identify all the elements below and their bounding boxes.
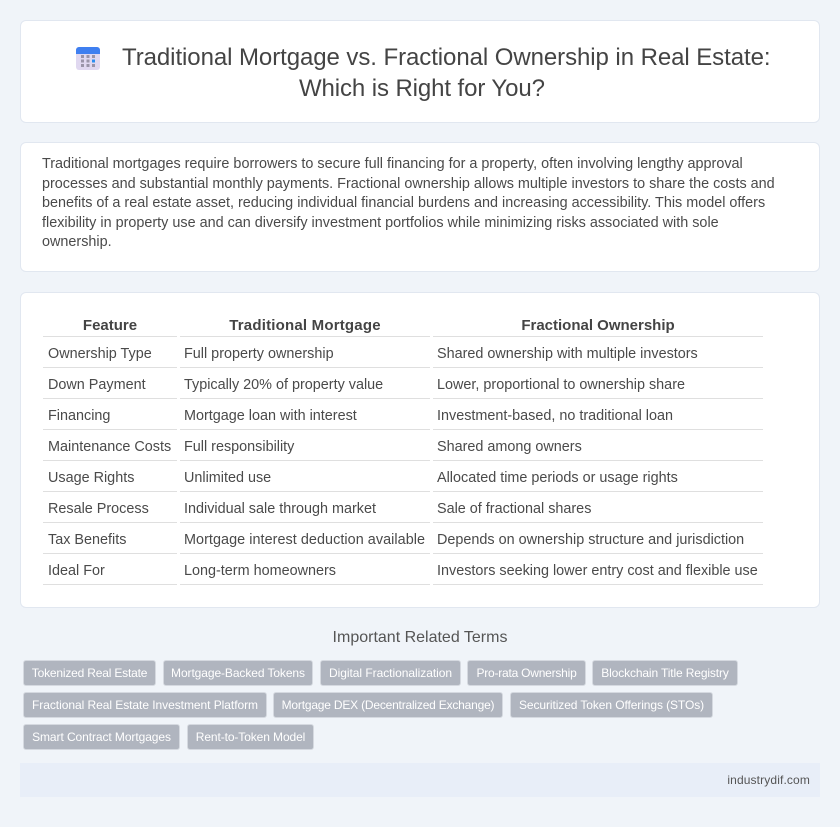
heading: related terms: Important Related Terms bbox=[333, 629, 507, 646]
title bbox=[122, 44, 770, 102]
table row: Ownership Type: Ownership Type bbox=[48, 346, 152, 362]
intro paragraph: flexibility in property use and can diversify investment portfolios while minimizing risks associated with sole bbox=[42, 214, 719, 230]
table row: Ownership Type: Shared ownership with multiple investors bbox=[437, 346, 698, 362]
table header: Traditional Mortgage bbox=[229, 317, 381, 334]
table row: Down Payment: Down Payment bbox=[48, 377, 146, 393]
table row: Resale Process: Resale Process bbox=[48, 501, 149, 517]
table row: Financing: Mortgage loan with interest bbox=[184, 408, 357, 424]
table row: Ideal For: Long-term homeowners bbox=[184, 563, 336, 579]
icon: calendar bbox=[76, 47, 100, 70]
table row: Maintenance Costs: Shared among owners bbox=[437, 439, 582, 455]
table row: Usage Rights: Unlimited use bbox=[184, 470, 271, 486]
tag bbox=[187, 724, 314, 750]
table row: Usage Rights: Usage Rights bbox=[48, 470, 134, 486]
table row: Tax Benefits bbox=[48, 532, 744, 548]
tag: Fractional Real Estate Investment Platform bbox=[32, 698, 258, 712]
panel: comparison table bbox=[20, 292, 820, 608]
intro paragraph: processes and substantial monthly payments. Fractional ownership allows multiple investors to share the costs and bbox=[42, 176, 775, 192]
tag bbox=[592, 660, 738, 686]
intro paragraph: benefits of a real estate asset, reducing individual financial burdens and increasing accessibility. This model offers bbox=[42, 195, 765, 211]
tag bbox=[510, 692, 713, 718]
table row: Resale Process: Sale of fractional shares bbox=[437, 501, 591, 517]
table row: Resale Process: Individual sale through market bbox=[184, 501, 376, 517]
tag bbox=[23, 692, 267, 718]
table row: Usage Rights: Allocated time periods or usage rights bbox=[437, 470, 678, 486]
tag: Pro-rata Ownership bbox=[476, 666, 577, 680]
tag: Rent-to-Token Model bbox=[196, 730, 305, 744]
table row: Down Payment: Lower, proportional to ownership share bbox=[437, 377, 685, 393]
table row: Tax Benefits: Tax Benefits bbox=[48, 532, 126, 548]
table row: Ideal For bbox=[48, 563, 758, 579]
tag: Securitized Token Offerings (STOs) bbox=[519, 698, 704, 712]
table row: Ideal For: Ideal For bbox=[48, 563, 105, 579]
table row: Down Payment bbox=[48, 377, 685, 393]
table row: Maintenance Costs: Maintenance Costs bbox=[48, 439, 171, 455]
tag bbox=[320, 660, 461, 686]
tag bbox=[23, 724, 180, 750]
table row: Maintenance Costs: Full responsibility bbox=[184, 439, 294, 455]
table header: Feature bbox=[83, 317, 137, 334]
title: Traditional Mortgage vs. Fractional Ownership in Real Estate: bbox=[122, 44, 770, 71]
tag: Mortgage DEX (Decentralized Exchange) bbox=[282, 698, 494, 712]
table row: Ownership Type bbox=[48, 346, 698, 362]
table row: Ideal For: Investors seeking lower entry cost and flexible use bbox=[437, 563, 758, 579]
tag group: related terms bbox=[23, 660, 738, 750]
table row: Tax Benefits: Mortgage interest deduction available bbox=[184, 532, 425, 548]
intro paragraph: ownership. bbox=[42, 234, 112, 250]
table row: Maintenance Costs bbox=[48, 439, 582, 455]
footer bar bbox=[20, 763, 820, 797]
table row: Financing: Financing bbox=[48, 408, 110, 424]
table row: Financing bbox=[48, 408, 673, 424]
panel: title card bbox=[20, 20, 820, 123]
intro paragraph: Traditional mortgages require borrowers to secure full financing for a property, often involving lengthy approval bbox=[42, 156, 743, 172]
table row: Down Payment: Typically 20% of property value bbox=[184, 377, 383, 393]
panel: intro text bbox=[20, 142, 820, 272]
table row: Resale Process bbox=[48, 501, 591, 517]
tag: Tokenized Real Estate bbox=[32, 666, 147, 680]
table header: Fractional Ownership bbox=[521, 317, 675, 334]
intro paragraph bbox=[42, 156, 775, 250]
title: Which is Right for You? bbox=[299, 75, 545, 102]
tag: Mortgage-Backed Tokens bbox=[171, 666, 305, 680]
tag: Digital Fractionalization bbox=[329, 666, 452, 680]
table header bbox=[83, 317, 675, 334]
table row: Financing: Investment-based, no traditional loan bbox=[437, 408, 673, 424]
tag bbox=[163, 660, 313, 686]
tag: Blockchain Title Registry bbox=[601, 666, 729, 680]
table row: Ownership Type: Full property ownership bbox=[184, 346, 334, 362]
table row: Usage Rights bbox=[48, 470, 678, 486]
tag: Smart Contract Mortgages bbox=[32, 730, 171, 744]
tag bbox=[467, 660, 586, 686]
table row: Tax Benefits: Depends on ownership structure and jurisdiction bbox=[437, 532, 744, 548]
tag bbox=[23, 660, 156, 686]
tag bbox=[273, 692, 503, 718]
footer source: industrydif.com bbox=[727, 773, 810, 787]
